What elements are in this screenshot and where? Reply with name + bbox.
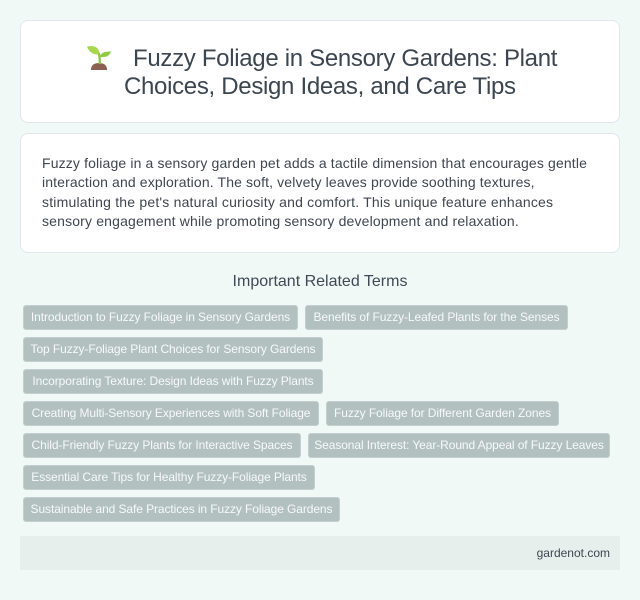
section heading: Important Related Terms [233,273,407,290]
tag [23,401,319,426]
tag [23,433,301,458]
tag: Fuzzy Foliage for Different Garden Zones [334,406,551,420]
intro paragraph card [20,133,620,253]
intro paragraph card: stimulating the pet's natural curiosity and comfort. This unique feature enhances [42,194,553,210]
footer text: gardenot.com [537,546,610,560]
paragraph text [42,155,587,229]
tag [23,369,323,394]
tag: Sustainable and Safe Practices in Fuzzy Foliage Gardens [31,502,332,516]
title text [124,45,558,100]
tag [308,433,610,458]
tag: Creating Multi-Sensory Experiences with Soft Foliage [32,406,310,420]
tag [23,465,315,490]
icon: seedling [87,46,111,70]
tag: Seasonal Interest: Year-Round Appeal of Fuzzy Leaves [314,438,604,452]
tag [326,401,559,426]
tag: Incorporating Texture: Design Ideas with Fuzzy Plants [32,374,314,388]
tag: Top Fuzzy-Foliage Plant Choices for Sensory Gardens [31,342,315,356]
title card: Fuzzy Foliage in Sensory Gardens: Plant [133,45,557,72]
tag [23,497,340,522]
intro paragraph card: interaction and exploration. The soft, velvety leaves provide soothing textures, [42,174,535,190]
related terms tags [23,305,610,522]
footer bar [20,536,620,570]
tag: Benefits of Fuzzy-Leafed Plants for the Senses [314,310,560,324]
tag: Essential Care Tips for Healthy Fuzzy-Foliage Plants [31,470,307,484]
title card: Choices, Design Ideas, and Care Tips [124,73,516,100]
tag: Introduction to Fuzzy Foliage in Sensory Gardens [31,310,290,324]
intro paragraph card: Fuzzy foliage in a sensory garden pet adds a tactile dimension that encourages gentle [42,155,587,171]
tag: Child-Friendly Fuzzy Plants for Interactive Spaces [32,438,292,452]
tag [23,305,298,330]
tag [305,305,568,330]
intro paragraph card: sensory engagement while promoting sensory development and relaxation. [42,213,519,229]
tag [23,337,323,362]
title card [20,20,620,123]
